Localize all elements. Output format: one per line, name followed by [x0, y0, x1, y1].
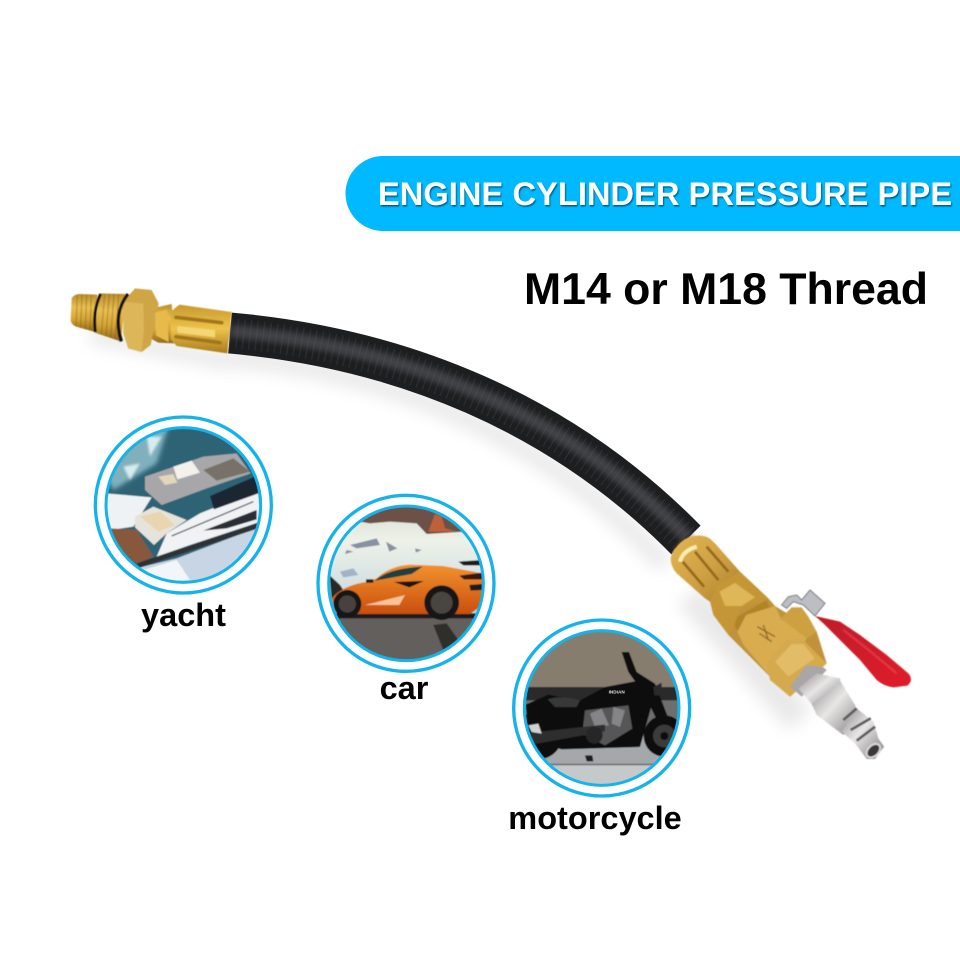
sleeve flat — [177, 326, 215, 337]
usage: yacht — [90, 410, 280, 633]
red handle — [815, 616, 911, 687]
plug opening — [864, 741, 883, 760]
sleeve highlight — [680, 547, 697, 562]
plug grooves — [843, 708, 875, 741]
valve marking — [757, 625, 775, 642]
second thread lines — [101, 294, 119, 339]
car icon — [316, 494, 496, 673]
hex highlight — [719, 583, 755, 606]
thread subtitle: M14 or M18 Thread — [524, 265, 928, 314]
handle bracket — [782, 590, 825, 616]
valve lower hex — [767, 640, 827, 697]
steel parts — [782, 590, 911, 760]
steel nipple — [790, 665, 827, 697]
banner title: ENGINE CYLINDER PRESSURE PIPE — [378, 176, 952, 212]
handle highlight — [843, 630, 897, 673]
sleeve grooves — [176, 317, 222, 343]
yacht icon — [94, 415, 273, 595]
sleeve ridges — [683, 547, 728, 587]
usage: motorcycle — [505, 612, 695, 836]
valve underlay — [710, 572, 827, 697]
yacht label: yacht — [141, 597, 226, 633]
rubber hose — [230, 331, 688, 540]
o-ring rear — [118, 294, 128, 341]
knurled sleeve — [171, 305, 232, 353]
steel neck — [842, 708, 884, 759]
valve stem — [781, 607, 817, 638]
tank badge: INDIAN — [609, 689, 625, 694]
hex nut face — [123, 302, 144, 352]
steel hex — [798, 673, 841, 707]
hose sleeve — [671, 535, 740, 602]
usage: car — [310, 490, 500, 706]
hose highlight — [230, 331, 688, 538]
lower hex highlight — [775, 644, 815, 677]
motorcycle icon — [512, 618, 692, 798]
valve body — [737, 606, 817, 680]
motorcycle label: motorcycle — [508, 800, 682, 836]
car label: car — [380, 670, 429, 706]
header banner — [346, 156, 960, 231]
o-ring front — [95, 294, 101, 332]
hose weave texture — [230, 333, 686, 540]
steel barrel — [812, 682, 860, 735]
neck — [146, 304, 175, 343]
valve assembly — [671, 535, 911, 760]
neck collar — [155, 309, 169, 342]
hex nut — [123, 288, 159, 352]
throat — [732, 600, 775, 635]
thread lines — [76, 295, 91, 331]
product shadow — [90, 335, 800, 720]
second thread section — [95, 293, 126, 341]
thread tip — [71, 294, 97, 332]
left brass fitting — [71, 288, 232, 353]
brass hex — [710, 572, 768, 635]
